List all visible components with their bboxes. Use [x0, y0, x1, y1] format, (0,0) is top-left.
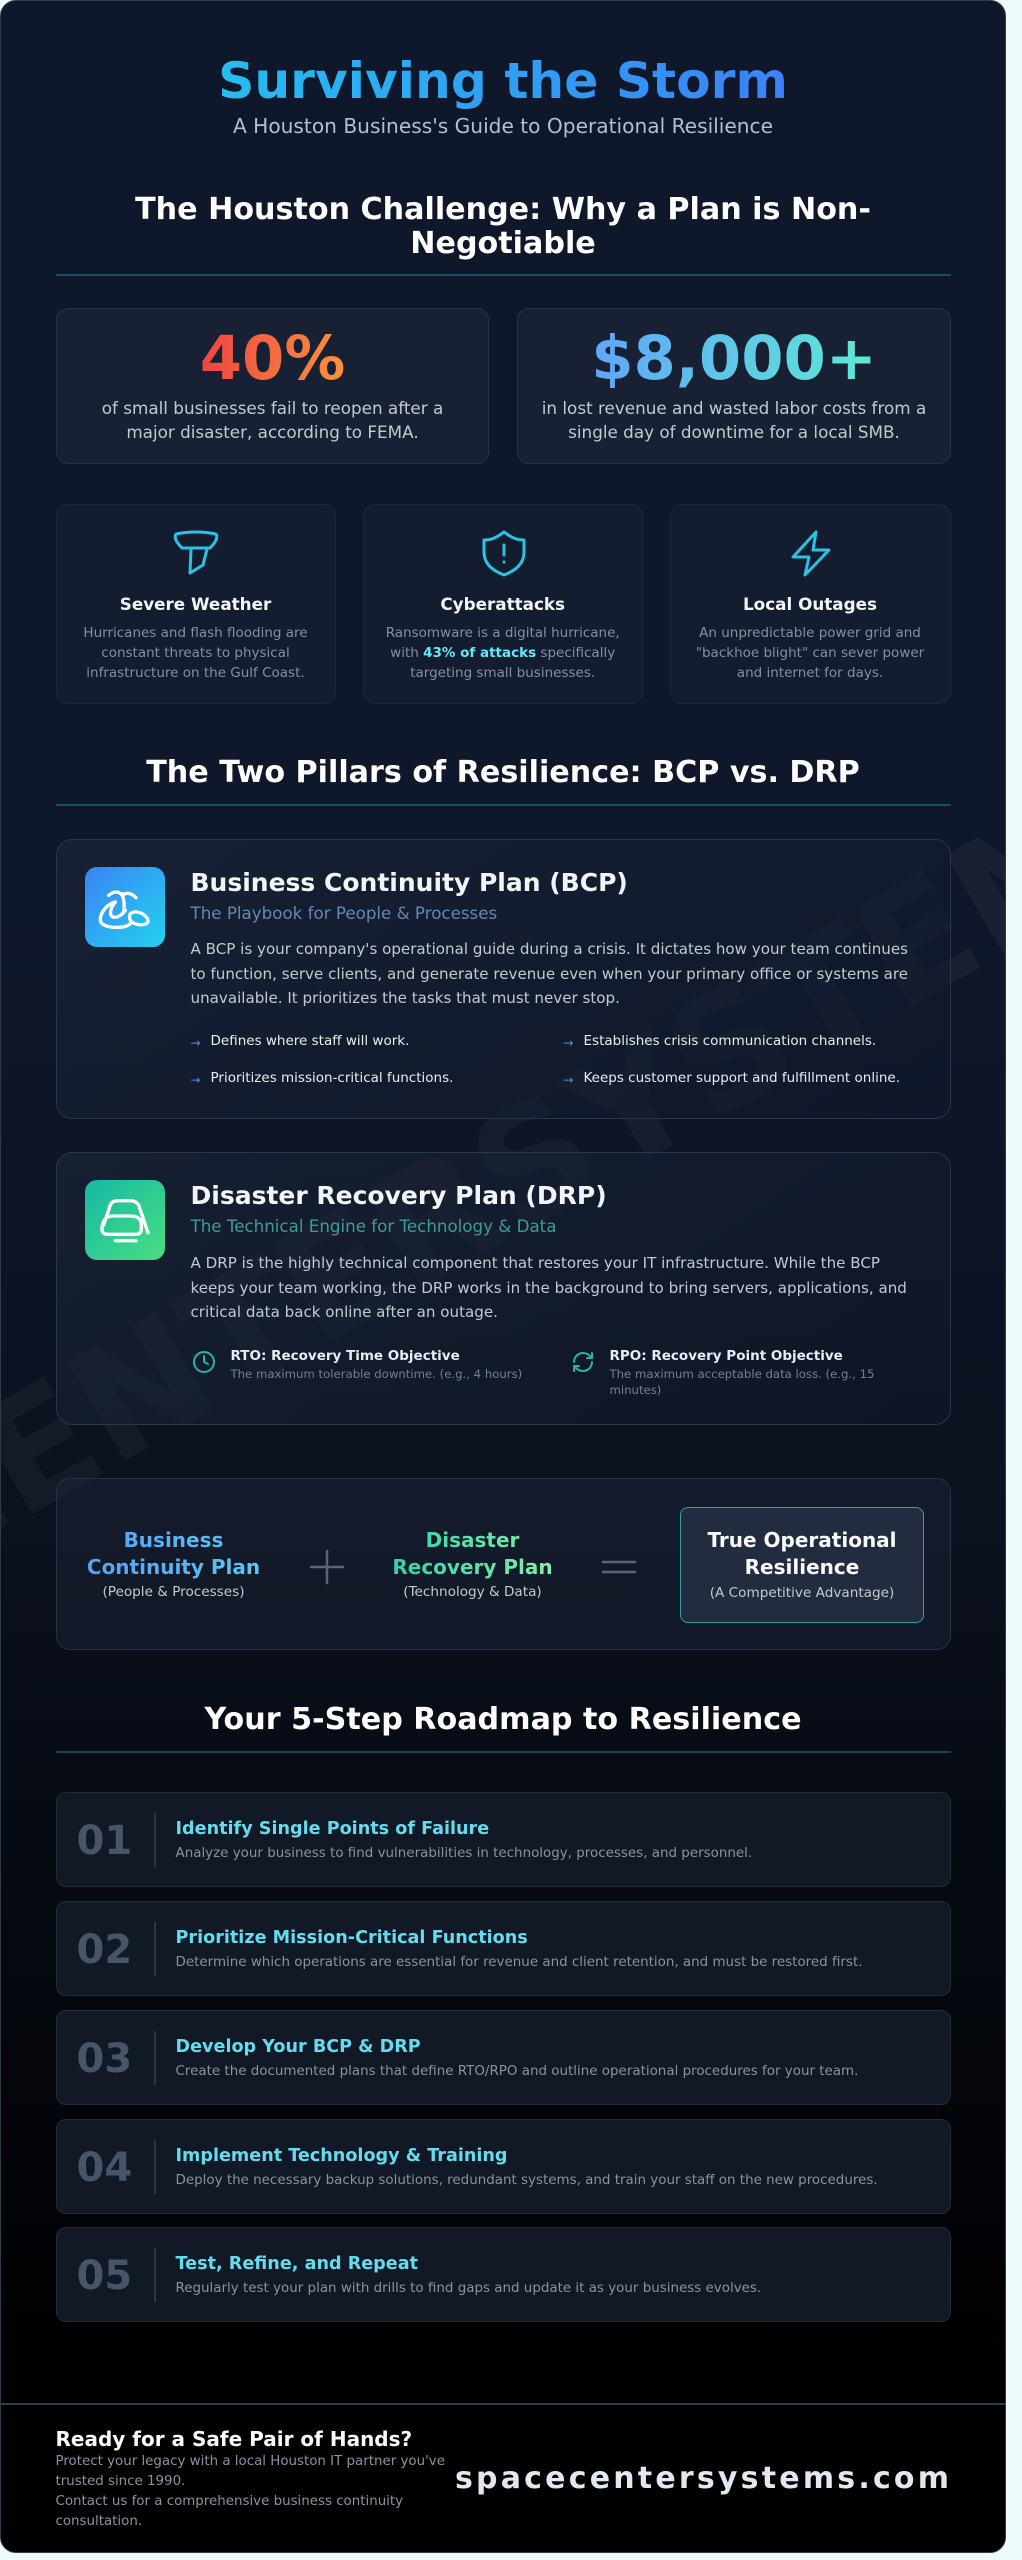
title: Surviving the Storm [218, 51, 788, 110]
threat description: "backhoe blight" can sever power [696, 645, 924, 661]
plan title: Business Continuity Plan (BCP) [190, 868, 628, 897]
plan body: unavailable. It prioritizes the tasks that must never stop. [190, 989, 620, 1007]
term name: Continuity Plan [87, 1555, 260, 1579]
plan subtitle: The Technical Engine for Technology & Data [190, 1216, 556, 1236]
bullet list [190, 1033, 900, 1087]
plan body: A DRP is the highly technical component that restores your IT infrastructure. While the BCP [190, 1254, 880, 1272]
step 1 [56, 1792, 950, 1887]
equation term: DRP [392, 1528, 553, 1600]
plus sign [310, 1550, 344, 1584]
footer text: consultation. [56, 2514, 142, 2529]
plan body: to function, serve clients, and generate revenue even when your primary office or systems are [190, 964, 908, 982]
stat text [542, 398, 926, 442]
footer text: Protect your legacy with a local Houston IT partner you've [56, 2454, 445, 2469]
step number: 05 [76, 2253, 132, 2299]
step description: Deploy the necessary backup solutions, redundant systems, and train your staff on the new procedures. [176, 2173, 878, 2188]
icon: tornado funnel [174, 530, 218, 574]
icon: clock [193, 1351, 215, 1373]
footer [1, 2403, 1007, 2555]
result title [707, 1528, 897, 1579]
step description: Create the documented plans that define RTO/RPO and outline operational procedures for your team. [176, 2064, 858, 2079]
step number: 04 [76, 2145, 132, 2191]
step number: 02 [76, 1927, 132, 1973]
threat card: local outages [670, 504, 950, 704]
step 3 [56, 2010, 950, 2105]
plan body [190, 940, 908, 1007]
term name: Recovery Plan [392, 1555, 553, 1579]
term name: Disaster [426, 1528, 519, 1552]
heading: Houston challenge: The Houston Challenge: Why a Plan is Non- [135, 192, 871, 227]
bullet list: Establishes crisis communication channels. [584, 1033, 876, 1049]
threat description [386, 625, 620, 681]
arrow: → [564, 1036, 574, 1050]
icon: island [84, 867, 164, 947]
heading: Houston challenge: Negotiable [410, 226, 596, 261]
threat description: with 43% of attacks specifically [390, 645, 615, 661]
threat description [83, 625, 308, 681]
result title: True Operational [707, 1528, 897, 1552]
threat card: severe weather [56, 504, 336, 704]
item title: RPO: Recovery Point Objective [610, 1348, 843, 1364]
heading: roadmap: Your 5-Step Roadmap to Resilience [204, 1702, 802, 1737]
step number: 01 [76, 1818, 132, 1864]
panel: DRP [56, 1152, 950, 1425]
heading: two pillars: The Two Pillars of Resilience: BCP vs. DRP [146, 755, 860, 790]
step title: Develop Your BCP & DRP [176, 2036, 421, 2056]
plan subtitle: The Playbook for People & Processes [190, 903, 497, 923]
term name [392, 1527, 553, 1580]
plan body: critical data back online after an outage. [190, 1303, 498, 1321]
threat description: An unpredictable power grid and [699, 625, 921, 641]
threat card: cyberattacks [363, 504, 643, 704]
arrow: → [564, 1073, 574, 1087]
heading: Houston challenge [135, 192, 871, 261]
plan body: A BCP is your company's operational guide during a crisis. It dictates how your team continues [190, 940, 908, 958]
step description: Analyze your business to find vulnerabilities in technology, processes, and personnel. [176, 1846, 752, 1861]
panel: equation [56, 1478, 950, 1650]
stat card: $8,000+ [517, 308, 950, 464]
term note: (Technology & Data) [403, 1584, 542, 1600]
term note: (People & Processes) [102, 1584, 245, 1600]
subtitle: A Houston Business's Guide to Operational Resilience [233, 114, 773, 138]
threat description: infrastructure on the Gulf Coast. [86, 665, 305, 681]
stat text: in lost revenue and wasted labor costs from a [542, 398, 926, 418]
step title: Test, Refine, and Repeat [176, 2254, 418, 2274]
step description: Determine which operations are essential for revenue and client retention, and must be restored first. [176, 1955, 862, 1970]
arrow: → [190, 1036, 201, 1050]
threat description: and internet for days. [737, 665, 883, 681]
threat description: Hurricanes and flash flooding are [83, 625, 308, 641]
arrow: → [190, 1073, 201, 1087]
bullet list: Keeps customer support and fulfillment online. [584, 1070, 900, 1086]
item description: The maximum tolerable downtime. (e.g., 4 hours) [230, 1367, 522, 1381]
RTO item [193, 1348, 522, 1381]
threat title: Local Outages [743, 594, 877, 614]
step 4 [56, 2119, 950, 2214]
icon: shield alert [482, 530, 526, 576]
step title: Identify Single Points of Failure [176, 1818, 489, 1838]
threat description: constant threats to physical [101, 645, 290, 661]
stat text [102, 398, 443, 442]
plan title: Disaster Recovery Plan (DRP) [190, 1181, 607, 1210]
icon: server [84, 1180, 164, 1260]
stat number: $8,000+ [591, 324, 877, 394]
step 2 [56, 1901, 950, 1996]
stat text: single day of downtime for a local SMB. [568, 422, 900, 442]
stat text: of small businesses fail to reopen after a [102, 398, 443, 418]
bullet list: Defines where staff will work. [210, 1033, 409, 1049]
step title: Prioritize Mission-Critical Functions [176, 1928, 528, 1948]
item description [610, 1367, 874, 1397]
term name [87, 1527, 260, 1580]
threat description: targeting small businesses. [410, 665, 595, 681]
step 5 [56, 2227, 950, 2322]
equals sign [602, 1560, 636, 1574]
icon: lightning bolt [791, 530, 831, 576]
step title: Implement Technology & Training [176, 2146, 508, 2166]
item description: The maximum acceptable data loss. (e.g., 15 [610, 1367, 874, 1381]
result title: Resilience [745, 1555, 859, 1579]
threat description: Ransomware is a digital hurricane, [386, 625, 620, 641]
threat title: Severe Weather [120, 594, 271, 614]
item title: RTO: Recovery Time Objective [230, 1348, 460, 1364]
panel: BCP [56, 839, 950, 1119]
result note: (A Competitive Advantage) [710, 1584, 894, 1600]
website: spacecentersystems.com [455, 2461, 952, 2496]
threat description [696, 625, 924, 681]
stat text: major disaster, according to FEMA. [126, 422, 419, 442]
footer text: trusted since 1990. [56, 2474, 185, 2489]
footer text: Contact us for a comprehensive business continuity [56, 2494, 403, 2509]
step description: Regularly test your plan with drills to find gaps and update it as your business evolves. [176, 2281, 761, 2296]
icon: refresh [573, 1352, 593, 1372]
footer text [56, 2454, 445, 2529]
step number: 03 [76, 2036, 132, 2082]
threat title: Cyberattacks [440, 594, 565, 614]
footer heading: Ready for a Safe Pair of Hands? [56, 2427, 412, 2451]
plan body [190, 1254, 907, 1321]
item description: minutes) [610, 1383, 661, 1397]
plan body: keeps your team working, the DRP works in the background to bring servers, applications, and [190, 1278, 907, 1296]
term name: Business [124, 1528, 223, 1552]
stat card: 40% [56, 308, 489, 464]
bullet list: Prioritizes mission-critical functions. [210, 1070, 453, 1086]
equation term: BCP [87, 1528, 260, 1600]
RPO item [573, 1348, 874, 1397]
stat number: 40% [200, 324, 345, 394]
result box [680, 1507, 924, 1623]
